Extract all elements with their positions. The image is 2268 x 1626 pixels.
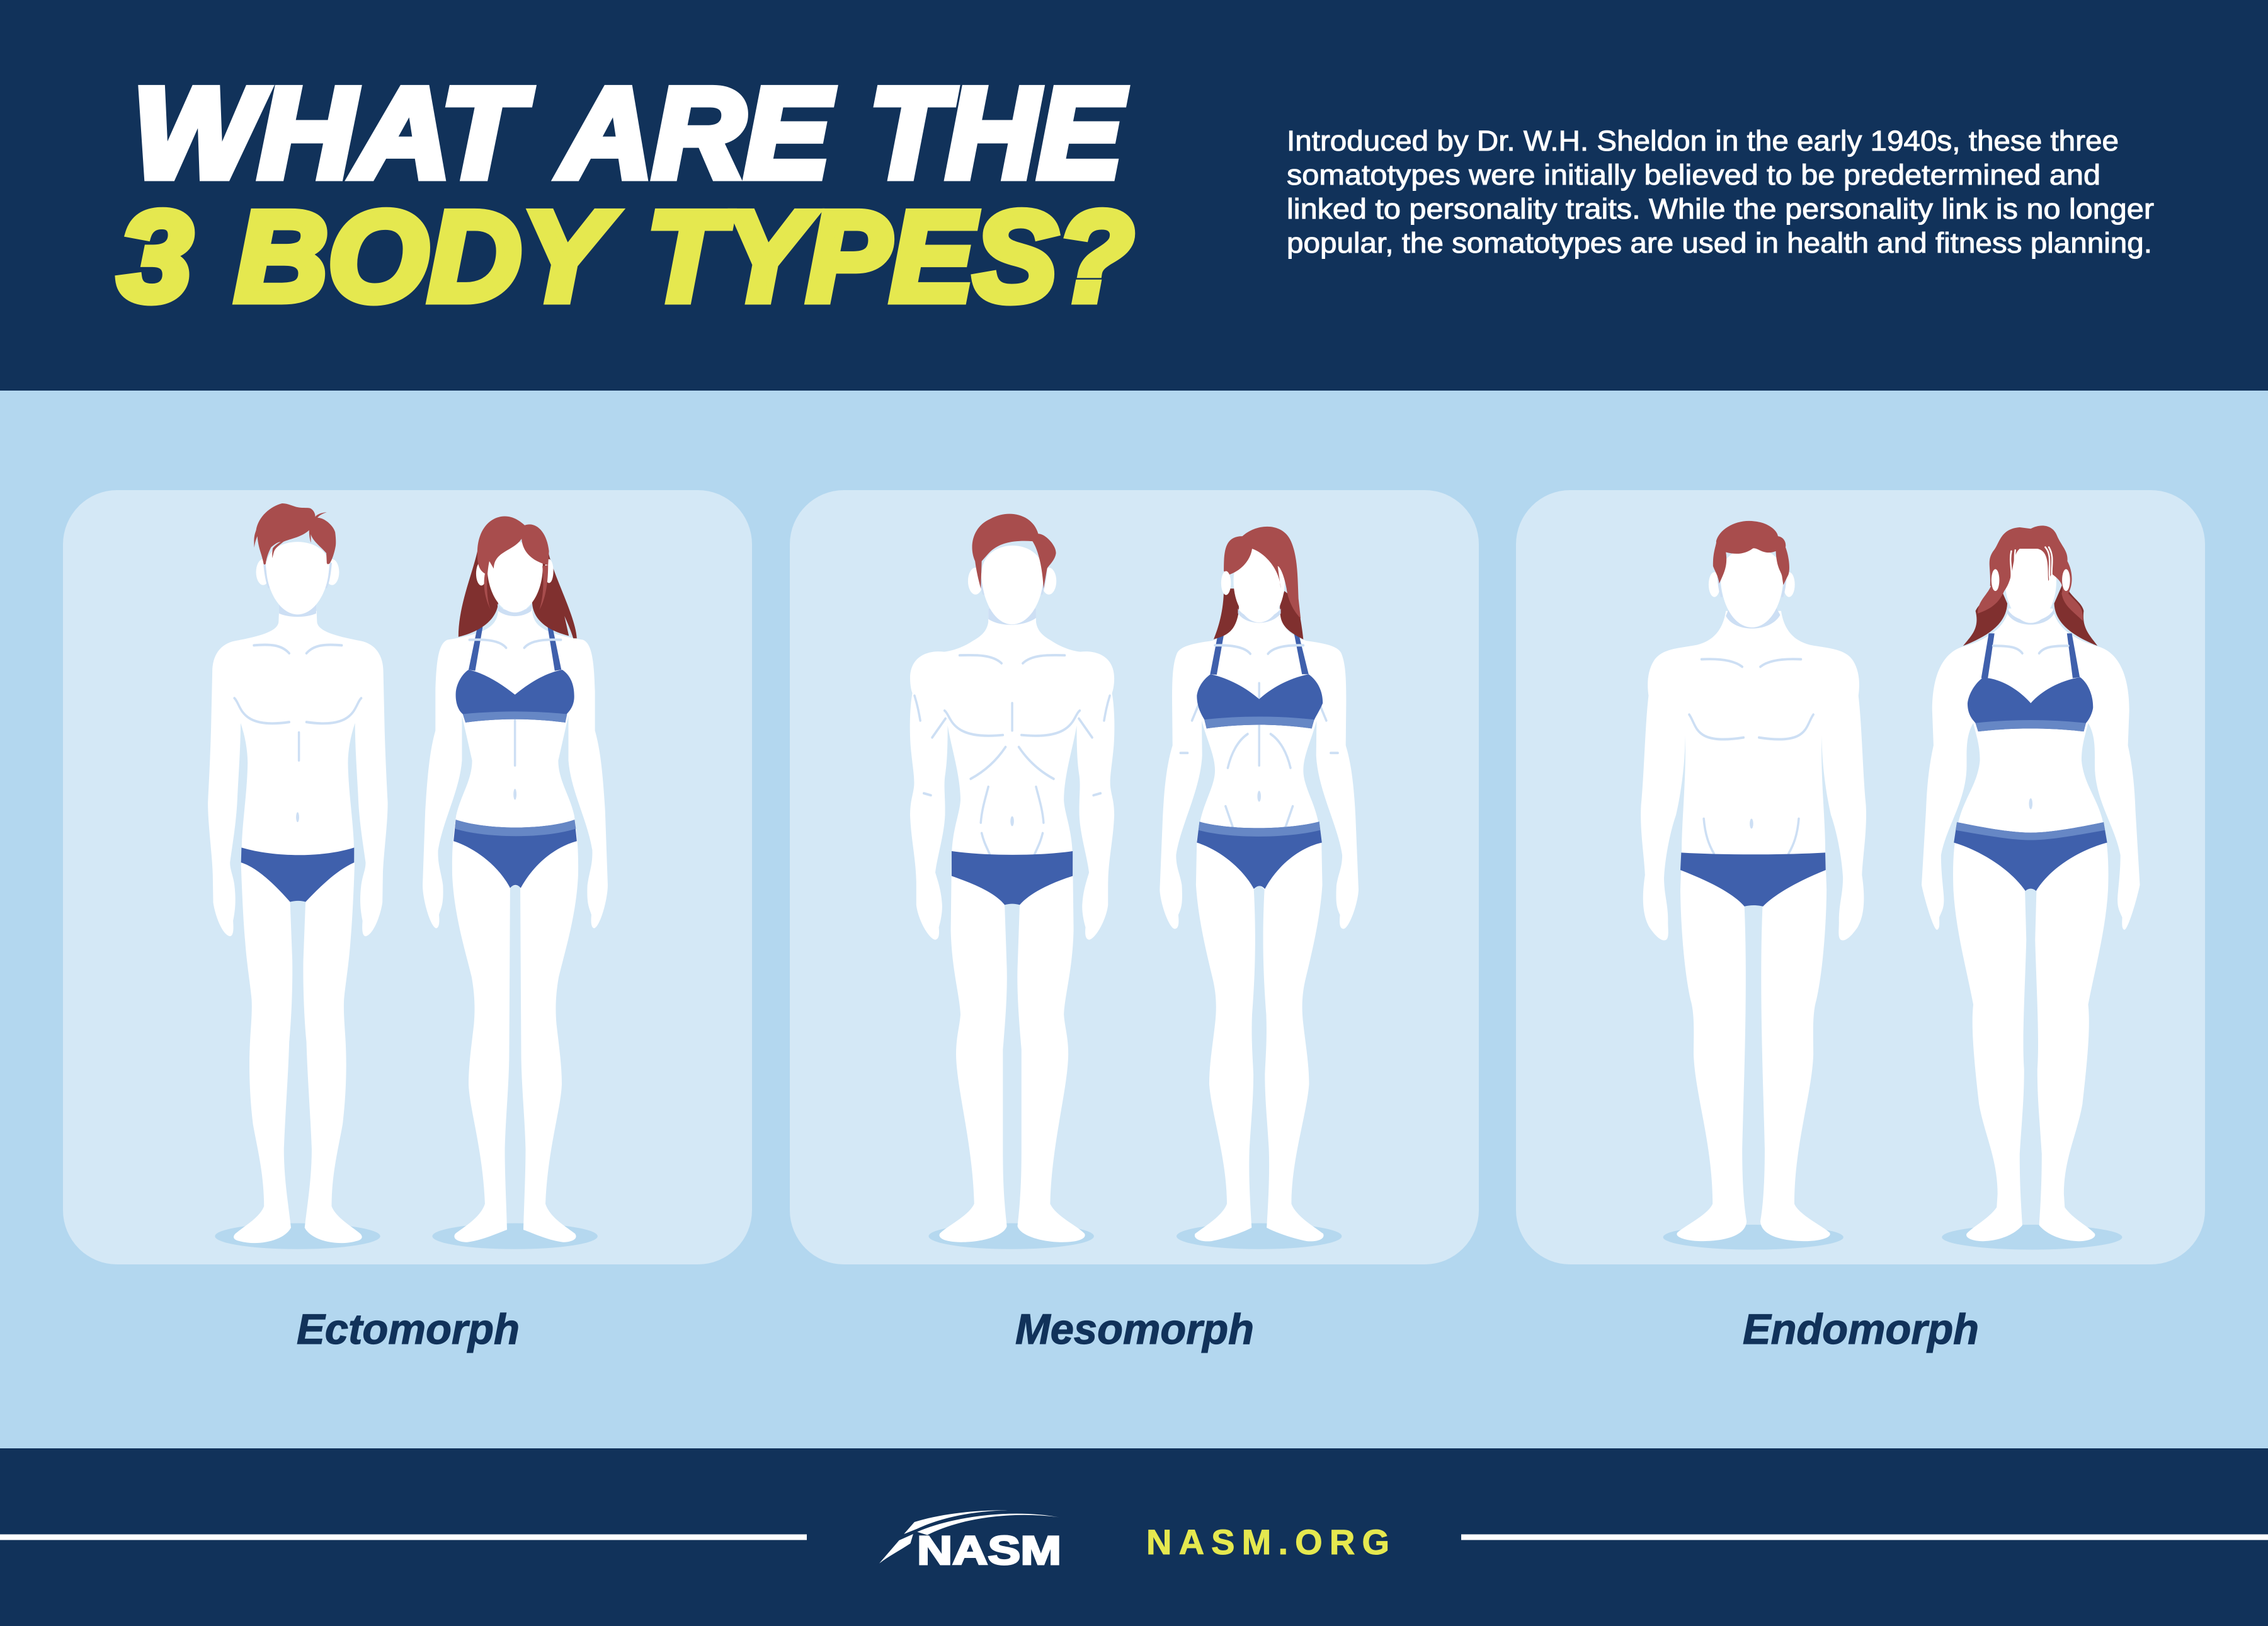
intro text: somatotypes were initially believed to be predetermined and bbox=[1287, 159, 2100, 191]
figure: mesomorph woman bbox=[1160, 527, 1359, 1249]
intro text bbox=[1287, 125, 2154, 259]
figure: endomorph man bbox=[1641, 521, 1866, 1250]
intro text: linked to personality traits. While the personality link is no longer bbox=[1287, 193, 2154, 225]
title: THE bbox=[869, 62, 1126, 205]
figure: ectomorph woman bbox=[423, 517, 608, 1249]
figures: endomorph bbox=[1641, 521, 2140, 1250]
website: NASM.ORG bbox=[1146, 1522, 1389, 1562]
label: mesomorph: Mesomorph bbox=[1015, 1305, 1254, 1353]
title: ARE bbox=[557, 62, 834, 205]
figures: ectomorph bbox=[208, 503, 608, 1249]
header band bbox=[0, 0, 2268, 391]
title: TYPES? bbox=[647, 185, 1134, 328]
figure: endomorph woman bbox=[1922, 525, 2140, 1250]
title bbox=[118, 62, 1134, 328]
logo: NASM bbox=[879, 1510, 1061, 1573]
figure: ectomorph man bbox=[208, 503, 388, 1249]
title: 3 bbox=[118, 185, 192, 328]
logo: NASM: NASM bbox=[917, 1528, 1061, 1573]
label: endomorph: Endomorph bbox=[1743, 1305, 1979, 1353]
panel: mesomorph bbox=[790, 490, 1479, 1264]
figure: mesomorph man bbox=[910, 514, 1114, 1249]
footer band bbox=[0, 1448, 2268, 1626]
figures: mesomorph bbox=[910, 514, 1359, 1249]
label: ectomorph: Ectomorph bbox=[297, 1305, 520, 1353]
title: WHAT bbox=[133, 62, 532, 205]
panel: ectomorph bbox=[63, 490, 752, 1264]
title: BODY bbox=[235, 185, 617, 328]
intro text: popular, the somatotypes are used in health and fitness planning. bbox=[1287, 227, 2152, 259]
panel: endomorph bbox=[1516, 490, 2205, 1264]
intro text: Introduced by Dr. W.H. Sheldon in the early 1940s, these three bbox=[1287, 125, 2119, 157]
